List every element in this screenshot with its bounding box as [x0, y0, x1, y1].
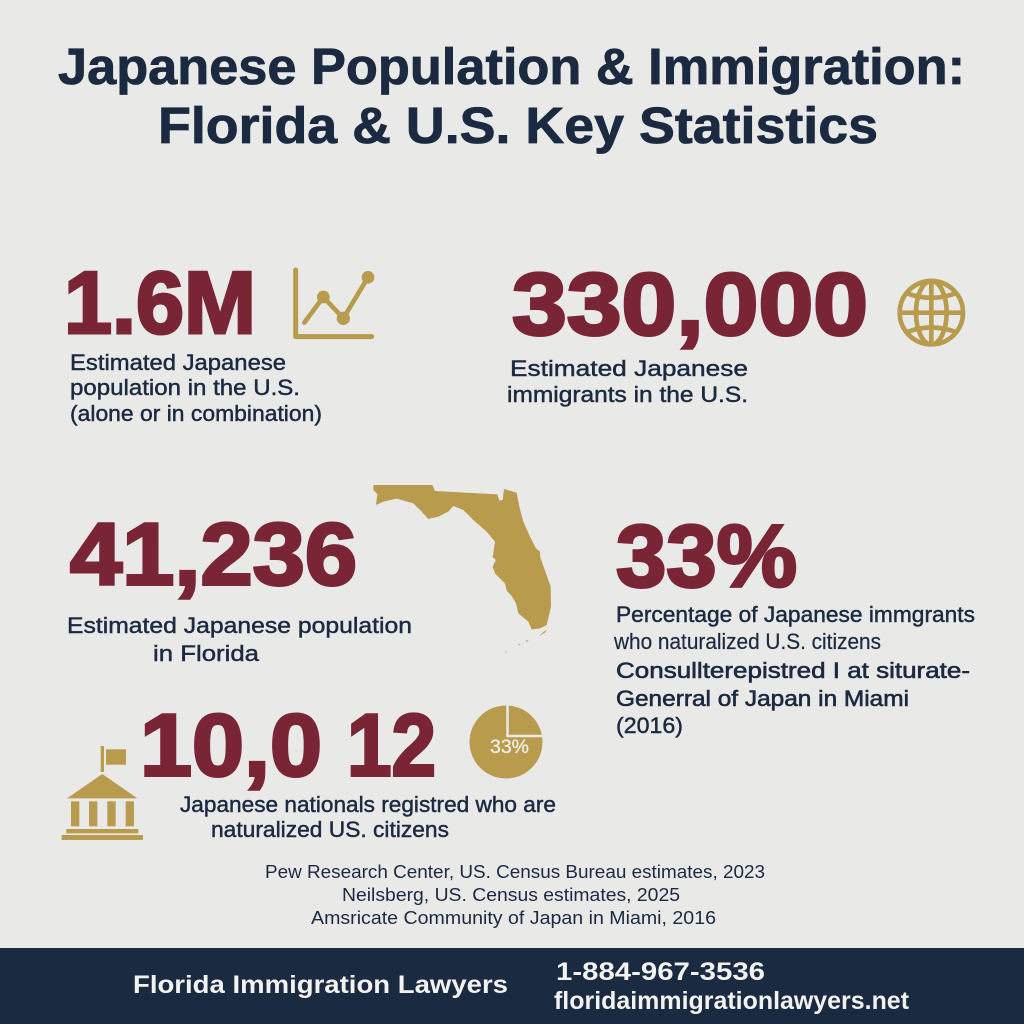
footer bar — [0, 948, 1024, 1024]
panel: U.S. Japanese population — [64, 253, 374, 426]
stat: 10,0 12: 10,0 — [140, 696, 322, 794]
stat: 41,236: 41,236 — [70, 504, 357, 604]
sources — [265, 862, 765, 928]
footer: contact details: 1-884-967-3536 — [556, 958, 765, 986]
description: immigrants: Estimated Japanese — [510, 356, 748, 381]
description: naturalization and consulate: who naturalized U.S. citizens — [613, 629, 881, 654]
stat: 33%: 33% — [616, 506, 797, 606]
stat: 330,000: 330,000 — [512, 254, 868, 354]
sources: Neilsberg, US. Census estimates, 2025 — [342, 885, 680, 905]
icon: line chart — [296, 270, 374, 337]
stat: 1.6M: 1.6M — [64, 253, 256, 352]
panel: registered nationals — [62, 696, 556, 842]
panel: Florida population — [67, 504, 412, 666]
stat: 10,0 12 — [140, 696, 436, 794]
icon: globe — [900, 281, 963, 344]
description: registered nationals: Japanese nationals registred who are — [180, 792, 556, 817]
description: naturalization and consulate: (2016) — [616, 713, 683, 738]
description: U.S. population: population in the U.S. — [70, 375, 300, 400]
description: registered nationals: naturalized US. citizens — [211, 817, 449, 842]
description: naturalization and consulate — [613, 602, 975, 738]
title: Japanese Population & Immigration: — [58, 38, 965, 95]
description: Florida population: in Florida — [153, 641, 260, 666]
description: Florida population — [67, 613, 412, 666]
icon: consulate building — [62, 746, 143, 840]
title: Florida & U.S. Key Statistics — [158, 97, 878, 154]
description: U.S. population: Estimated Japanese — [70, 350, 286, 375]
icon: pie chart 33% — [470, 705, 543, 778]
footer: contact details: floridaimmigrationlawyers.net — [554, 987, 910, 1015]
footer: firm name: Florida Immigration Lawyers — [133, 971, 508, 999]
description: U.S. population: (alone or in combination) — [70, 401, 322, 426]
description: immigrants: immigrants in the U.S. — [507, 382, 748, 407]
description: U.S. population — [70, 350, 322, 426]
sources: Pew Research Center, US. Census Bureau estimates, 2023 — [265, 862, 765, 882]
description: registered nationals — [180, 792, 556, 842]
panel: naturalization percentage — [613, 506, 975, 738]
description: naturalization and consulate: Generral of Japan in Miami — [616, 686, 909, 711]
description: Florida population: Estimated Japanese population — [67, 613, 412, 638]
sources: Amsricate Community of Japan in Miami, 2016 — [311, 908, 716, 928]
icon: pie chart 33%: 33% — [490, 737, 529, 758]
title — [58, 38, 965, 154]
icon: Florida map — [373, 485, 551, 653]
description: naturalization and consulate: Consullterepistred I at siturate- — [616, 658, 970, 683]
description: immigrants — [507, 356, 748, 407]
footer: contact details — [554, 958, 910, 1015]
description: naturalization and consulate: Percentage of Japanese immgrants — [616, 602, 975, 627]
panel: U.S. Japanese immigrants — [507, 254, 963, 407]
stat: 10,0 12: 12 — [347, 696, 436, 794]
